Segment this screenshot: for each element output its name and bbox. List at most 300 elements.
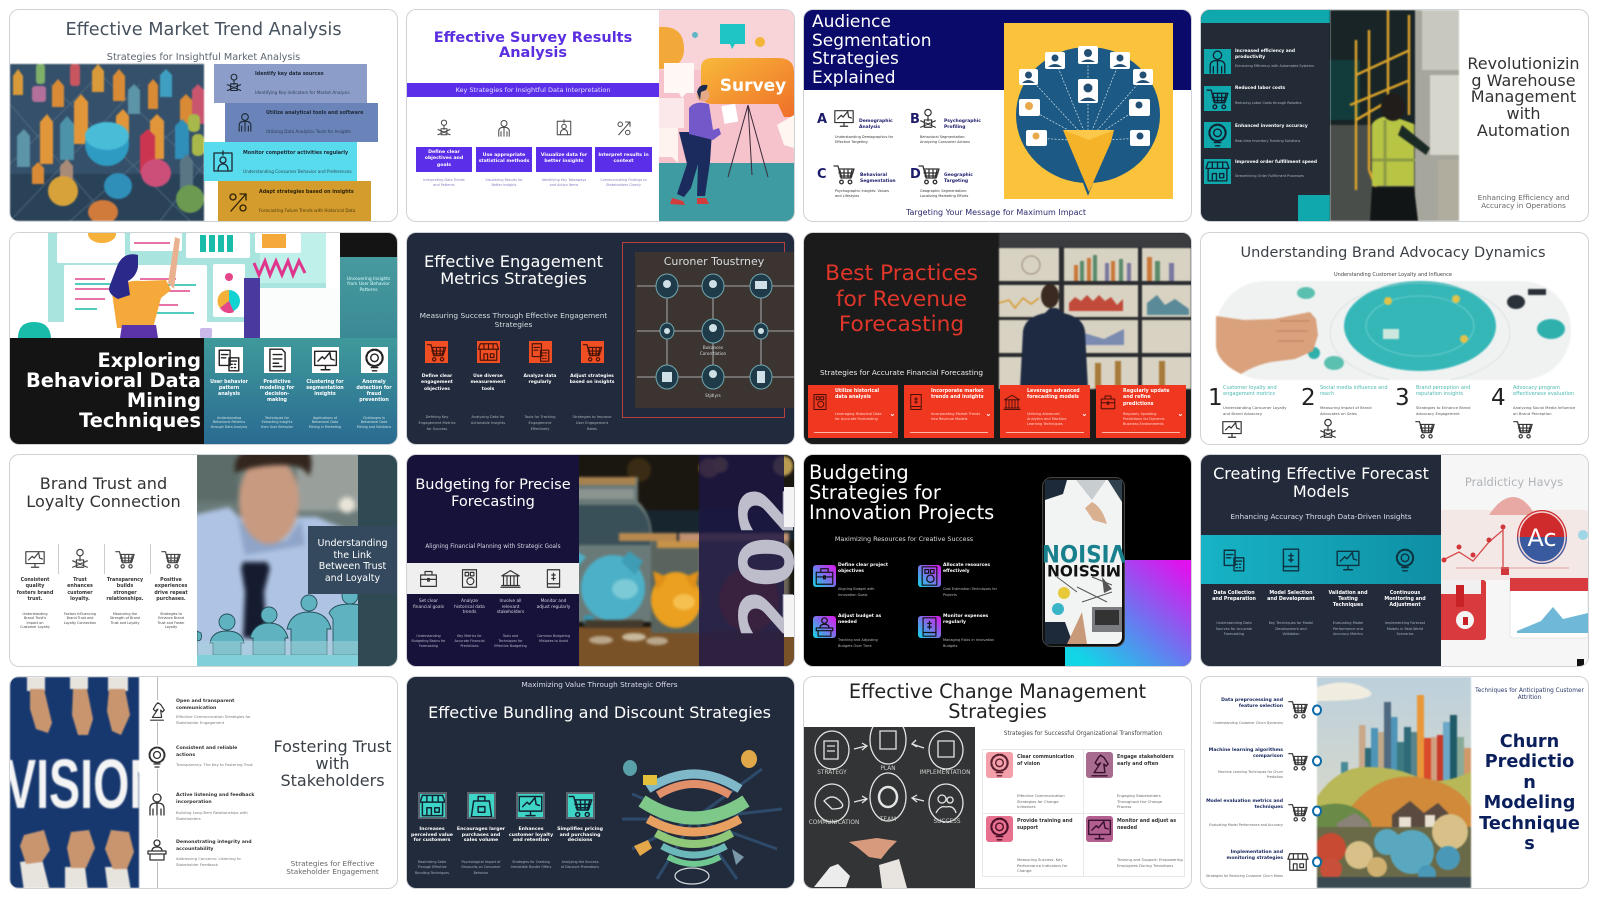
title: s bbox=[1524, 834, 1535, 854]
icon: gear bbox=[361, 347, 388, 373]
block text: Identify key data sources bbox=[255, 72, 324, 77]
item: allocate resources: Cost Estimation Techniques for bbox=[943, 587, 997, 591]
text bbox=[1017, 755, 1074, 768]
step headings: analysis bbox=[218, 392, 240, 397]
step captions: Strategies for Creating bbox=[512, 860, 550, 864]
block text bbox=[266, 110, 364, 134]
icon: growth bbox=[618, 122, 630, 136]
step headings: sales volume bbox=[464, 838, 498, 843]
phone mockup bbox=[1042, 477, 1125, 647]
steps: Analyze bbox=[461, 599, 478, 604]
card: market trends: trends and insights bbox=[931, 395, 984, 400]
item: monitor expenses: regularly bbox=[943, 620, 966, 625]
step headings: Use diverse bbox=[473, 374, 503, 379]
captions: Understanding bbox=[22, 612, 47, 616]
icon bbox=[1099, 390, 1117, 414]
item 1: Understanding Consumer Loyalty bbox=[1223, 405, 1286, 410]
image: chalkboard strategy: COMMUNICATION bbox=[809, 820, 859, 826]
benefit 2: Reducing Labor Costs through Robotics bbox=[1235, 101, 1302, 105]
statements bbox=[10, 578, 197, 604]
icon: shop bbox=[1286, 851, 1310, 873]
subtitle: Strategies for Accurate Financial Forecasting bbox=[820, 368, 983, 377]
subtitle: Strategies for Effective bbox=[291, 859, 374, 868]
step box 3: Visualize data for bbox=[541, 153, 587, 158]
captions: Effective Budgeting bbox=[494, 644, 527, 648]
teal gradient panels bbox=[340, 257, 397, 338]
icon bbox=[907, 390, 925, 414]
item 1 bbox=[1208, 383, 1298, 441]
subtitle: Maximizing Resources for Creative Success bbox=[835, 535, 973, 543]
image: man facing chart wall bbox=[999, 233, 1191, 389]
subtitle: Techniques for Anticipating Customer bbox=[1475, 688, 1584, 694]
text: Clear communication bbox=[1017, 755, 1074, 760]
benefit 4 bbox=[1204, 159, 1317, 184]
block text: Monitor competitor activities regularly bbox=[243, 151, 348, 156]
step: integrity: Addressing Concerns: Listening to bbox=[176, 856, 241, 861]
segment B: B bbox=[910, 112, 920, 127]
step captions: Interpreting Data Trends bbox=[423, 178, 465, 182]
title bbox=[268, 738, 397, 789]
icon bbox=[811, 390, 829, 414]
strategy grid bbox=[982, 749, 1185, 877]
image: vision fists bbox=[10, 677, 139, 888]
title: Strategies bbox=[812, 49, 899, 69]
captions: Predictions bbox=[460, 644, 479, 648]
step headings: and purchasing bbox=[560, 833, 600, 838]
item 4 bbox=[1491, 383, 1586, 441]
item 1: Customer loyalty and bbox=[1223, 385, 1277, 391]
panel: audience segmentation bbox=[804, 10, 1191, 221]
image: customer journey chalkboard: Cororrtlation bbox=[700, 351, 727, 356]
block text: Adapt strategies based on insights bbox=[259, 190, 354, 195]
icon: growth arrow bbox=[229, 193, 247, 212]
step captions: Models in Real-World bbox=[1387, 627, 1423, 631]
benefit 1: productivity bbox=[1235, 54, 1265, 60]
icon: calculator bbox=[529, 341, 552, 363]
step: communication: Open and transparent bbox=[176, 699, 234, 704]
item 2: reach bbox=[1320, 391, 1334, 397]
item: define objectives: Innovation Goals bbox=[838, 593, 867, 597]
black corner bbox=[340, 233, 397, 257]
step captions: Psychological Impact of bbox=[462, 860, 500, 864]
block: identify data sources bbox=[214, 64, 367, 103]
teal top strip bbox=[1201, 10, 1330, 23]
icon: gear bbox=[1392, 547, 1418, 573]
step captions bbox=[1201, 621, 1441, 639]
panel: behavioral data mining bbox=[10, 233, 397, 444]
title: Understanding Brand Advocacy Dynamics bbox=[1240, 245, 1546, 261]
card: forecasting models: Analytics and Machine bbox=[1027, 417, 1066, 421]
segment B: Analyzing Consumer Actions bbox=[920, 140, 970, 144]
panel: stakeholder trust bbox=[10, 677, 397, 888]
title: Metrics Strategies bbox=[440, 269, 587, 288]
step headings: Adjust strategies bbox=[570, 374, 614, 379]
step headings: Anomaly bbox=[362, 380, 386, 385]
benefit 4: Improved order fulfillment speed bbox=[1235, 160, 1317, 165]
image: piggy banks and jars bbox=[579, 455, 794, 666]
card: forecasting models: Learning Techniques bbox=[1027, 422, 1063, 426]
card: market trends: Incorporate market bbox=[931, 389, 983, 394]
title: Modeling bbox=[1484, 793, 1575, 813]
step captions: Validation bbox=[1282, 632, 1300, 636]
icon: cart bbox=[160, 548, 182, 570]
title: Analysis bbox=[499, 45, 567, 61]
step: consistent actions: Transparency: The Key to Fostering Trust bbox=[176, 762, 253, 767]
card: historical data: Utilize historical bbox=[835, 389, 879, 394]
text bbox=[1117, 755, 1174, 768]
block: analytical tools bbox=[225, 103, 378, 142]
step captions: for Success bbox=[427, 427, 447, 431]
step box 3 bbox=[536, 147, 592, 172]
title: Management bbox=[1471, 87, 1576, 106]
icon tile bbox=[1204, 159, 1231, 184]
item: adjust budget: Budgets Over Time bbox=[838, 644, 872, 648]
title: Techniques bbox=[79, 409, 201, 432]
item: monitor expenses: Budgets bbox=[943, 644, 957, 648]
caption bbox=[1117, 793, 1162, 810]
icon tile bbox=[1086, 816, 1113, 842]
benefit 3: Enhanced inventory accuracy bbox=[1235, 124, 1308, 129]
title: Effective Market Trend Analysis bbox=[65, 20, 342, 40]
benefit 3: Real-time Inventory Tracking Solutions bbox=[1235, 139, 1300, 143]
technique 4: Implementation and bbox=[1231, 850, 1283, 855]
icon: book bbox=[1278, 547, 1304, 573]
card: historical data: for Accurate Forecasting bbox=[835, 417, 878, 421]
step captions: Bundling Techniques bbox=[415, 871, 449, 875]
teal band bbox=[1201, 535, 1441, 584]
icon tile bbox=[918, 616, 941, 638]
segment A: Effective Targeting bbox=[835, 140, 868, 144]
captions: Trust and Foster bbox=[157, 621, 185, 625]
panel: forecast models bbox=[1201, 455, 1588, 666]
timeline rings bbox=[1311, 702, 1323, 867]
card: forecasting models: ⌄ bbox=[1081, 409, 1088, 418]
title: Best Practices bbox=[825, 261, 978, 286]
segment D: Localizing Marketing Efforts bbox=[920, 194, 968, 198]
title bbox=[812, 12, 931, 88]
step captions: Performance and bbox=[1333, 627, 1363, 631]
block: competitor monitoring bbox=[204, 142, 357, 181]
step: active listening: Stakeholders bbox=[176, 816, 201, 821]
step captions: Implementing Forecast bbox=[1385, 621, 1425, 625]
card: forecasting models: Utilizing Advanced bbox=[1027, 412, 1060, 416]
caption bbox=[1117, 857, 1183, 868]
step captions: Understanding bbox=[217, 416, 241, 420]
technique 2: comparison bbox=[1253, 754, 1283, 759]
step captions: and Patterns bbox=[433, 183, 455, 187]
segment D: D bbox=[910, 167, 921, 182]
step headings: Monitoring and bbox=[1384, 597, 1426, 602]
step headings: for customers bbox=[414, 838, 450, 843]
title bbox=[424, 252, 603, 288]
step headings: prevention bbox=[359, 398, 389, 403]
image: data landscape bbox=[1317, 677, 1471, 888]
step headings: making bbox=[267, 398, 287, 403]
subtitle bbox=[1471, 688, 1588, 702]
item: monitor expenses: Monitor expenses bbox=[943, 614, 988, 619]
segment A bbox=[817, 110, 894, 144]
panel: innovation budgeting bbox=[804, 455, 1191, 666]
dark teal strip bbox=[358, 455, 397, 666]
icon: id badge bbox=[556, 119, 572, 136]
step box 3: better insights bbox=[544, 159, 584, 164]
step captions: Communicating Findings to bbox=[600, 178, 647, 182]
callout bbox=[308, 526, 397, 594]
technique 3: techniques bbox=[1254, 805, 1283, 810]
title bbox=[1467, 54, 1580, 140]
title bbox=[1201, 465, 1441, 500]
subtitle: Enhancing Efficiency and bbox=[1478, 193, 1569, 202]
step captions bbox=[423, 178, 647, 187]
card: update predictions: predictions bbox=[1123, 402, 1153, 407]
step headings: fraud bbox=[367, 392, 381, 397]
step captions: Behavioral Data bbox=[361, 420, 387, 424]
statements: enhances bbox=[67, 584, 93, 589]
image: predictive dashboard: Ac bbox=[1527, 524, 1557, 552]
title: Creating Effective Forecast bbox=[1213, 464, 1429, 483]
icon: target bbox=[1317, 418, 1339, 440]
title: g Warehouse bbox=[1471, 71, 1576, 90]
subtitle: Strategies bbox=[495, 320, 532, 328]
step headings: Adjustment bbox=[1389, 603, 1421, 608]
step captions: Stakeholders Clearly bbox=[606, 183, 641, 187]
segment D bbox=[910, 165, 973, 198]
card: update predictions bbox=[1096, 385, 1186, 438]
item 4: 4 bbox=[1491, 385, 1506, 411]
benefit 2: Reduced labor costs bbox=[1235, 86, 1285, 91]
title: Effective Survey Results bbox=[434, 30, 632, 46]
step headings: and Preparation bbox=[1212, 597, 1256, 602]
icon: gear bbox=[145, 745, 169, 769]
captions: Impact on bbox=[26, 621, 44, 625]
caption 2: Prediction bbox=[1267, 774, 1283, 778]
step headings: User behavior bbox=[210, 380, 248, 385]
item: adjust budget: needed bbox=[838, 620, 857, 625]
icon: podium bbox=[145, 838, 169, 862]
step captions: Through Effective bbox=[417, 865, 447, 869]
step: active listening: Active listening and feedback bbox=[176, 793, 254, 798]
subtitle: Enhancing Accuracy Through Data-Driven Insights bbox=[1230, 512, 1412, 521]
benefit 4: Streamlining Order Fulfillment Processes bbox=[1235, 174, 1304, 178]
captions: Forecasting bbox=[419, 644, 438, 648]
panel: change management bbox=[804, 677, 1191, 888]
image: customer journey chalkboard: Stjdlyrs bbox=[705, 393, 721, 398]
block text bbox=[243, 150, 352, 174]
step headings: engagement bbox=[421, 380, 453, 385]
step headings: Clustering for bbox=[306, 380, 344, 385]
title: Explained bbox=[812, 68, 895, 88]
step: active listening bbox=[145, 790, 265, 826]
item: monitor expenses: Managing Risks in Innovation bbox=[943, 638, 994, 642]
steps: stakeholders bbox=[497, 610, 524, 615]
icon: cart bbox=[566, 792, 595, 819]
segment B: Psychographic bbox=[944, 119, 981, 124]
title: Stakeholders bbox=[280, 771, 385, 790]
icon: document bbox=[264, 347, 291, 373]
caption: Change bbox=[1017, 868, 1032, 873]
item: define objectives: Aligning Budget with bbox=[838, 587, 874, 591]
image: chalkboard strategy: SUCCESS bbox=[933, 819, 961, 825]
statements: Consistent bbox=[21, 578, 49, 583]
illustration: colourful funnel bbox=[612, 749, 794, 888]
step headings: Encourages larger bbox=[457, 827, 505, 832]
icon: briefcase bbox=[418, 568, 439, 589]
benefit 1: Increased efficiency and bbox=[1235, 49, 1295, 54]
segment A: Understanding Demographics for bbox=[835, 135, 893, 139]
card: historical data: Leveraging Historical Data bbox=[835, 412, 881, 416]
card: forecasting models: forecasting models bbox=[1027, 395, 1079, 400]
statements: quality bbox=[26, 584, 44, 589]
step captions: through Data Analysis bbox=[211, 425, 247, 429]
card: market trends bbox=[904, 385, 994, 438]
technique 2: Machine learning algorithms bbox=[1209, 748, 1283, 753]
caption: Strategies for Change bbox=[1017, 799, 1059, 804]
icon tile bbox=[1086, 752, 1113, 778]
panel: survey results bbox=[407, 10, 794, 221]
step captions: Analyzing Data for bbox=[471, 415, 505, 419]
title: Technique bbox=[1479, 814, 1580, 834]
text: Monitor and adjust as bbox=[1117, 819, 1176, 824]
captions: Accurate Financial bbox=[454, 639, 485, 643]
item 4: Advocacy program bbox=[1513, 385, 1560, 391]
image: customer journey chalkboard bbox=[635, 252, 794, 408]
title bbox=[434, 30, 632, 61]
block text bbox=[255, 71, 350, 95]
steps: historical data bbox=[454, 605, 485, 610]
title bbox=[10, 475, 197, 510]
captions: Brand Trust's bbox=[24, 616, 46, 620]
step headings: decisions bbox=[568, 838, 592, 843]
overlay text: Uncovering Insights bbox=[347, 277, 390, 282]
statements: Trust bbox=[73, 578, 87, 583]
item: monitor expenses bbox=[918, 616, 1018, 652]
item 1: engagement metrics bbox=[1223, 391, 1275, 397]
technique 1 bbox=[1201, 698, 1283, 710]
dark left panel bbox=[1201, 10, 1330, 221]
caption 1: Understanding Customer Churn Dynamics bbox=[1213, 721, 1283, 725]
image: predictive dashboard bbox=[1441, 455, 1588, 666]
title bbox=[804, 682, 1191, 722]
gradient block bbox=[1065, 560, 1191, 666]
step captions: Engagement Metrics bbox=[418, 421, 456, 425]
captions: Brand Trust and bbox=[67, 616, 93, 620]
step headings: pattern bbox=[219, 386, 239, 391]
captions: Common Budgeting bbox=[537, 634, 570, 638]
step captions: Irresistible Bundle Offers bbox=[511, 865, 551, 869]
segment B: Behavioral Segmentation: bbox=[920, 135, 966, 139]
panel: budgeting for forecasting bbox=[407, 455, 794, 666]
white icon band bbox=[407, 563, 579, 594]
step headings: decision- bbox=[265, 392, 289, 397]
captions: Measuring the bbox=[113, 612, 137, 616]
steps: Set clear bbox=[419, 599, 438, 604]
statements: Positive bbox=[160, 578, 182, 583]
title bbox=[26, 349, 201, 432]
step captions: Mining and Solutions bbox=[357, 425, 391, 429]
item: adjust budget: Adjust budget as bbox=[838, 614, 881, 619]
step headings: measurement bbox=[470, 380, 506, 385]
image: 3D market pins bbox=[10, 63, 205, 221]
image: businessman and figures bbox=[197, 455, 358, 666]
step headings: insights bbox=[314, 392, 336, 397]
item: adjust budget bbox=[813, 616, 913, 652]
step headings bbox=[1201, 591, 1441, 611]
segment D: Geographic bbox=[944, 173, 973, 178]
statements: drive repeat bbox=[154, 591, 188, 596]
icon: money bbox=[459, 568, 480, 589]
icon: bag bbox=[467, 792, 496, 819]
caption: Effective Communication bbox=[1017, 793, 1065, 798]
title: Budgeting bbox=[809, 461, 909, 484]
title bbox=[1471, 732, 1588, 854]
step box 4: Interpret results in bbox=[598, 153, 649, 158]
band: key strategies: Key Strategies for Insightful Data Interpretation bbox=[456, 86, 610, 94]
icon: person bbox=[238, 113, 252, 132]
image: predictive dashboard: Praldicticy Havys bbox=[1465, 475, 1563, 489]
text bbox=[1017, 819, 1073, 832]
segment A: A bbox=[817, 112, 827, 127]
dividers bbox=[58, 544, 151, 574]
icon: chart bbox=[312, 347, 339, 373]
step headings bbox=[407, 374, 620, 394]
icon: cart bbox=[1286, 801, 1310, 823]
segment C bbox=[817, 165, 896, 198]
icon: shop bbox=[418, 792, 447, 819]
steps: Monitor and bbox=[541, 599, 566, 604]
segment D: Targeting bbox=[944, 179, 968, 184]
step captions: Better Insights bbox=[492, 183, 516, 187]
icon: cart bbox=[918, 165, 940, 184]
red frame bbox=[622, 242, 785, 418]
statements: trust. bbox=[27, 597, 43, 602]
step captions: Defining Key bbox=[426, 415, 448, 419]
icon tile bbox=[813, 616, 836, 638]
captions: Budgeting Basics for bbox=[411, 639, 446, 643]
caption: Process bbox=[1117, 804, 1131, 809]
step captions bbox=[210, 416, 392, 429]
eyebrow: Maximizing Value Through Strategic Offers bbox=[522, 680, 678, 689]
item: define objectives bbox=[813, 565, 913, 601]
card: update predictions: ⌄ bbox=[1177, 409, 1184, 418]
title: Effective Change Management bbox=[849, 680, 1146, 703]
step captions: Maximizing Sales bbox=[418, 860, 446, 864]
teal steps panel bbox=[204, 338, 397, 444]
statements: fosters brand bbox=[17, 591, 53, 596]
text: of vision bbox=[1017, 762, 1040, 767]
title: Innovation Projects bbox=[809, 501, 994, 524]
icon: book bbox=[543, 568, 564, 589]
technique 3: Model evaluation metrics and bbox=[1206, 799, 1283, 804]
card: forecasting models: Leverage advanced bbox=[1027, 389, 1080, 394]
card: update predictions: Regularly Updating bbox=[1123, 412, 1157, 416]
step captions: Development and bbox=[1275, 627, 1307, 631]
icon: monitor bbox=[24, 548, 46, 570]
card: forecasting models bbox=[1000, 385, 1090, 438]
text: needed bbox=[1117, 826, 1137, 831]
title: Audience bbox=[812, 12, 891, 32]
image: chalkboard strategy: TEAM bbox=[879, 817, 896, 823]
image: chalkboard strategy: IMPLEMENTATION bbox=[920, 770, 970, 776]
step headings: Analyze data bbox=[524, 374, 556, 379]
icon: person bbox=[498, 120, 510, 137]
title: Predictio bbox=[1485, 752, 1574, 772]
benefit 1 bbox=[1204, 48, 1314, 74]
image: survey illustration: Survey bbox=[720, 76, 786, 96]
step headings: Validation and bbox=[1328, 591, 1368, 596]
icon bbox=[1003, 390, 1021, 414]
step captions bbox=[407, 860, 617, 876]
step captions: Mining in Marketing bbox=[309, 425, 341, 429]
